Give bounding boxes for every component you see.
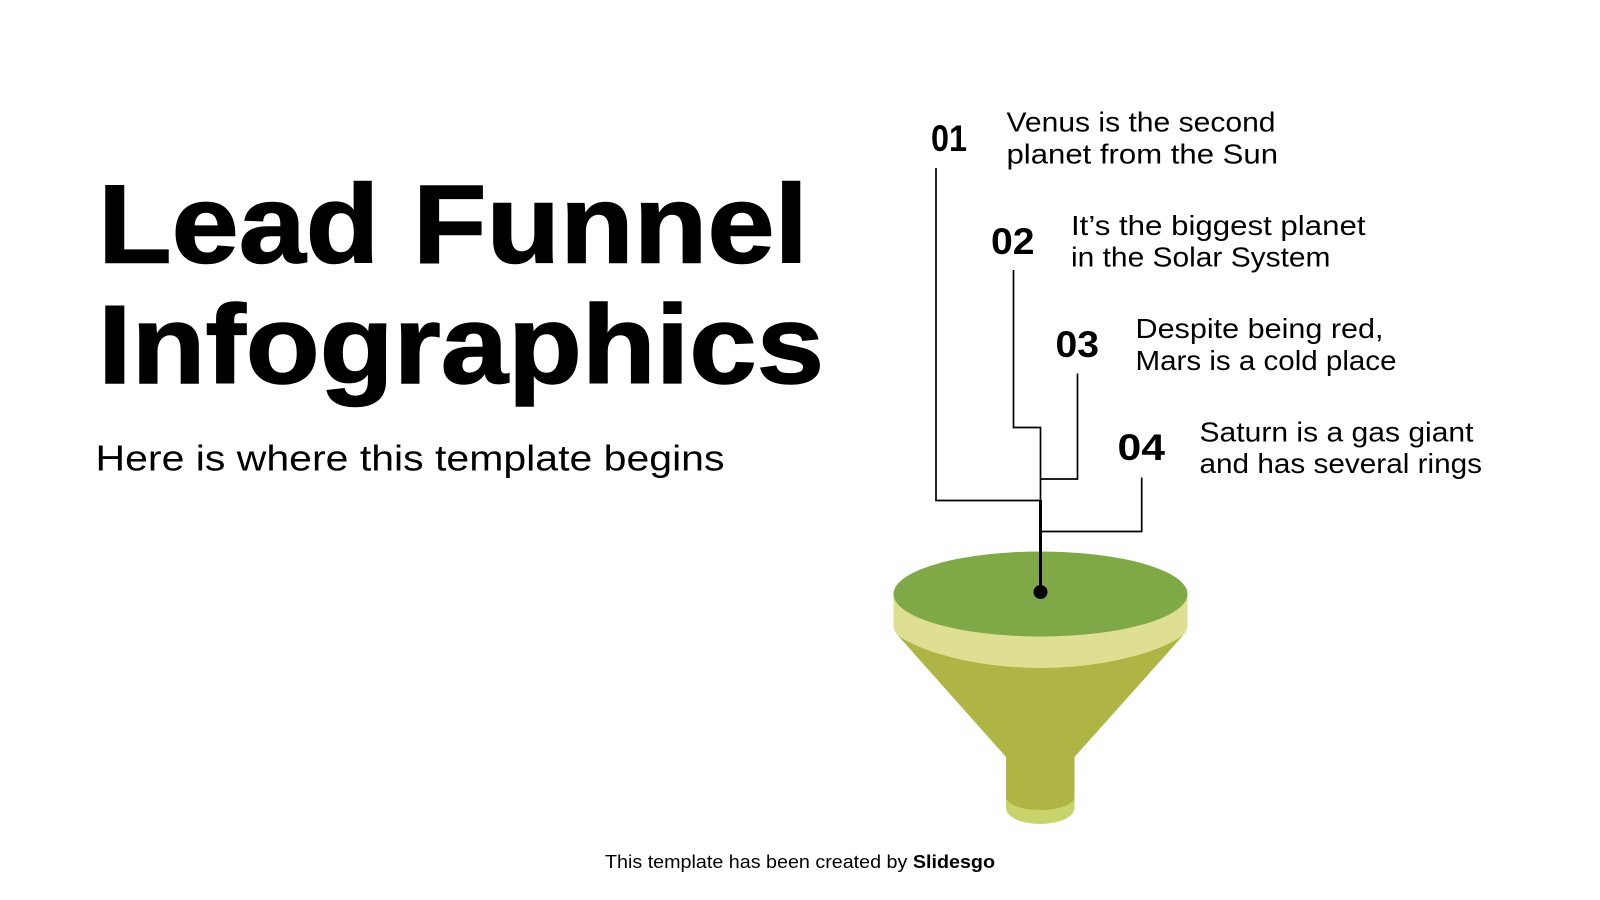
step 04 (1118, 416, 1482, 479)
footer credit: This template has been created by Slidesgo (605, 851, 995, 872)
funnel dot (1034, 585, 1048, 599)
number 01: 01 (931, 118, 967, 159)
connector lines (936, 168, 1142, 592)
connector 01 (936, 168, 1040, 500)
text 02: It’s the biggest planet (1071, 210, 1366, 241)
central stem line (1039, 500, 1042, 592)
connector 03 (1040, 374, 1078, 479)
text 01 (1006, 106, 1278, 170)
text 01: Venus is the second (1006, 106, 1276, 138)
text 04 (1200, 416, 1482, 479)
connector 02 (1014, 270, 1040, 500)
text 03: Mars is a cold place (1136, 345, 1396, 376)
title (98, 162, 824, 407)
subtitle: Here is where this template begins (96, 438, 724, 478)
text 03: Despite being red, (1136, 313, 1384, 344)
step 03 (1056, 313, 1396, 376)
funnel (894, 552, 1188, 824)
number 03: 03 (1056, 324, 1099, 365)
title: Infographics (98, 283, 824, 407)
step 02 (991, 210, 1366, 272)
text 01: planet from the Sun (1006, 138, 1278, 170)
funnel top surface (894, 552, 1188, 636)
step 01 (931, 106, 1278, 170)
title: Lead Funnel (98, 162, 808, 286)
text 04: Saturn is a gas giant (1200, 416, 1474, 448)
text 02: in the Solar System (1071, 242, 1330, 272)
text 02 (1071, 210, 1366, 272)
funnel rim (894, 594, 1188, 668)
number 04: 04 (1118, 427, 1165, 468)
number 02: 02 (991, 221, 1034, 262)
connector 04 (1040, 478, 1142, 532)
funnel cone (898, 600, 1184, 800)
text 04: and has several rings (1200, 448, 1482, 479)
funnel stem base (1006, 795, 1074, 824)
funnel stem bottom (1006, 784, 1074, 810)
text 03 (1136, 313, 1396, 376)
